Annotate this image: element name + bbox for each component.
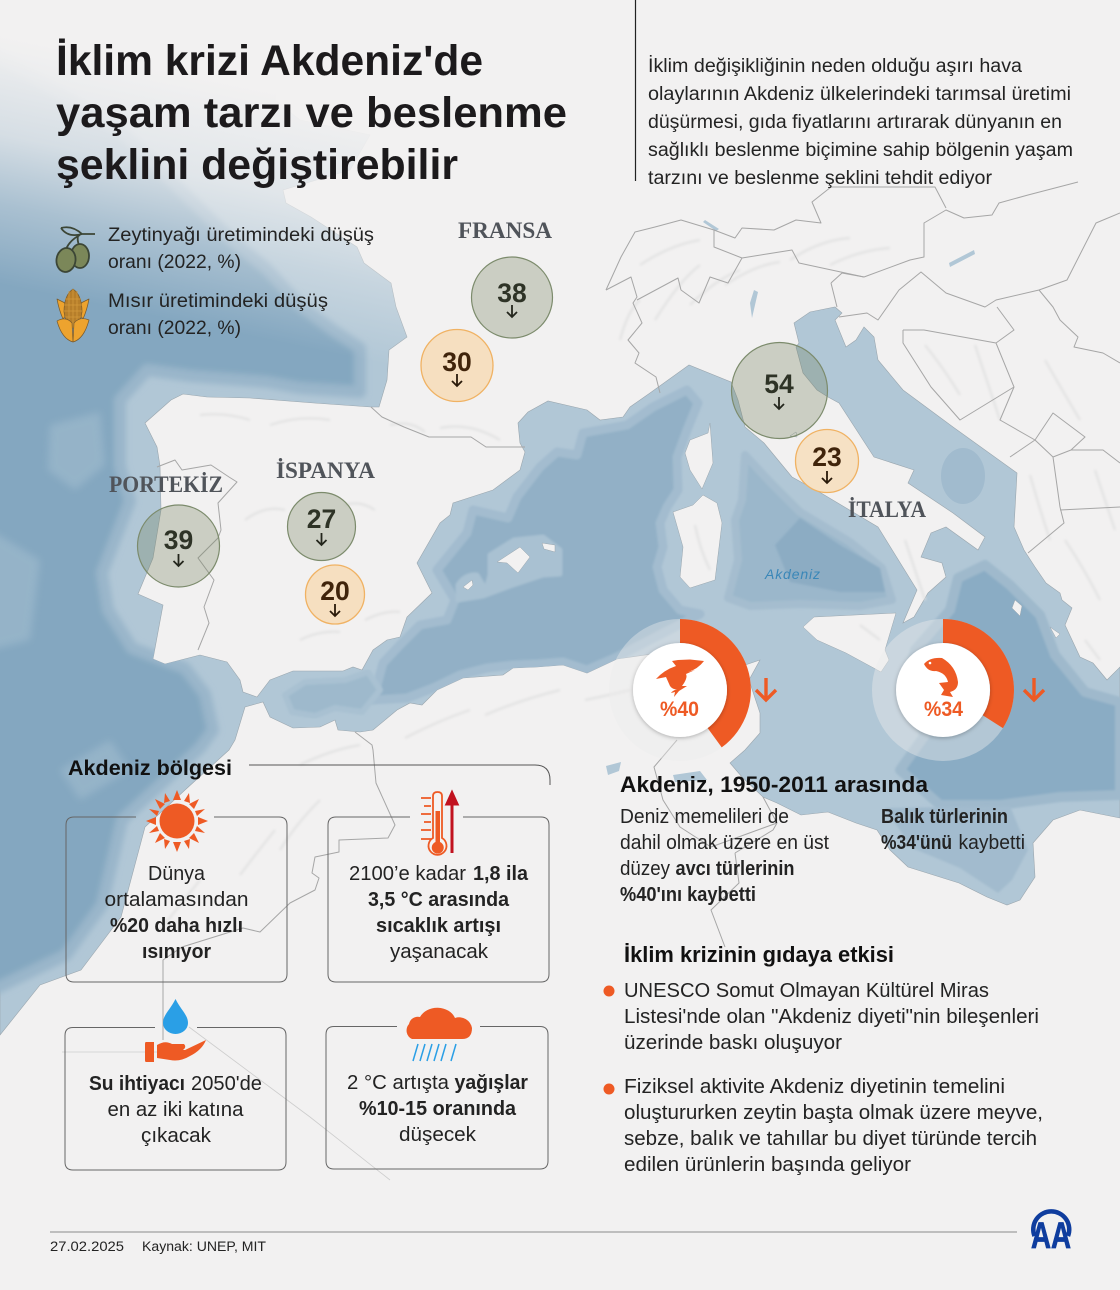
heading: Mediterranean region: Akdeniz bölgesi — [68, 756, 232, 780]
bubble: France corn 30: 30 — [442, 347, 472, 377]
card: warming rate — [66, 790, 287, 982]
text block: Mediterranean species loss: %40'ını kaybetti — [620, 884, 756, 906]
legend label: olive oil — [108, 224, 374, 273]
legend label: corn: oranı (2022, %) — [108, 317, 241, 339]
text block: Mediterranean species loss: düzey — [620, 858, 670, 880]
card: temperature rise: 1,8 ila — [473, 863, 529, 885]
Alboran basin — [285, 672, 380, 716]
intro text: olaylarının Akdeniz ülkelerindeki tarımsal üretimi — [648, 84, 1071, 105]
card: temperature rise: 2100’e kadar — [349, 863, 466, 885]
card: water demand: Su ihtiyacı — [89, 1073, 185, 1095]
icon: fish — [924, 658, 958, 697]
card: temperature rise: sıcaklık artışı — [376, 915, 501, 937]
footer — [50, 1232, 1017, 1254]
card: rainfall — [326, 1008, 548, 1169]
card: warming rate: Dünya — [148, 863, 206, 885]
text block: Mediterranean species loss — [620, 772, 929, 906]
text block: food impact: İklim krizinin gıdaya etkisi — [624, 942, 894, 967]
icon: thermometer — [421, 792, 457, 855]
title: şeklini değiştirebilir — [56, 142, 458, 189]
text block: food impact: UNESCO Somut Olmayan Kültürel Miras — [624, 980, 989, 1002]
donut chart: apex predators 40%: %40 — [660, 698, 699, 721]
bubble: Spain olive 27: 27 — [307, 504, 336, 534]
Gulf of Sirte shelf — [885, 806, 1028, 893]
text block: fish species — [881, 806, 1025, 854]
text block: fish species: %34'ünü — [881, 832, 952, 854]
intro text: sağlıklı beslenme biçimine sahip bölgenin yaşam — [648, 140, 1073, 161]
icon: cloud — [407, 1008, 472, 1061]
icon: hand — [145, 1040, 206, 1062]
card: rainfall: düşecek — [399, 1124, 477, 1146]
intro text: tarzını ve beslenme şeklini tehdit ediyor — [648, 168, 993, 189]
bubble: Spain corn 20 — [306, 565, 364, 624]
bubble: Portugal olive 39 — [138, 505, 220, 587]
legend label: corn: Mısır üretimindeki düşüş — [108, 290, 328, 312]
legend label: olive oil: oranı (2022, %) — [108, 251, 241, 273]
intro text: düşürmesi, gıda fiyatlarını artırarak dünyanın en — [648, 112, 1062, 133]
text block: food impact — [604, 942, 1043, 1176]
relief shading — [160, 238, 1115, 930]
card: warming rate: ortalamasından — [104, 889, 248, 911]
Balearic shelf — [458, 537, 560, 600]
sea label: Akdeniz — [764, 566, 820, 582]
legend label: olive oil: Zeytinyağı üretimindeki düşüş — [108, 224, 374, 246]
text block: food impact: üzerinde baskı oluşuyor — [624, 1032, 842, 1054]
deep water: Atlantic — [0, 20, 360, 1015]
icon: shark — [656, 660, 704, 697]
Tyrrhenian and Sardinia channel — [728, 455, 892, 606]
heading: Mediterranean region — [68, 756, 550, 785]
text block: Mediterranean species loss: dahil olmak üzere en üst — [620, 832, 829, 854]
card: water demand: 2050'de — [191, 1073, 262, 1095]
footer: Kaynak: UNEP, MIT — [142, 1239, 266, 1254]
bubble: Portugal olive 39: 39 — [164, 525, 193, 555]
text block: food impact: Listesi'nde olan "Akdeniz diyeti"nin bileşenleri — [624, 1006, 1039, 1028]
lighter Atlantic patches — [0, 412, 130, 800]
text block: Mediterranean species loss: Akdeniz, 1950-2011 arasında — [620, 772, 929, 797]
country label: Portugal: PORTEKİZ — [109, 472, 223, 497]
bubble: France corn 30 — [421, 330, 493, 402]
islands — [463, 423, 1060, 672]
text block: fish species: kaybetti — [958, 832, 1025, 854]
donut chart: apex predators 40% — [621, 619, 776, 749]
intro text: İklim değişikliğinin neden olduğu aşırı hava — [648, 56, 1022, 77]
bubble: Italy olive 54 — [732, 342, 828, 438]
card: water demand — [65, 999, 286, 1170]
text block: food impact: sebze, balık ve tahıllar bu diyet türünde tercih — [624, 1128, 1037, 1150]
icon: sun — [146, 790, 208, 852]
card: warming rate: %20 daha hızlı — [110, 915, 243, 937]
intro text — [636, 0, 1073, 189]
donut chart: fish species 34% — [884, 619, 1044, 749]
bubble: Italy olive 54: 54 — [764, 369, 794, 399]
country label: Spain: İSPANYA — [276, 458, 375, 483]
icon: corn — [57, 289, 89, 342]
title — [56, 38, 567, 189]
card: water demand: en az iki katına — [108, 1099, 244, 1121]
bubble: France olive 38 — [472, 257, 552, 338]
text block: Mediterranean species loss: avcı türlerinin — [676, 858, 794, 880]
text block: food impact: edilen ürünlerin başında geliyor — [624, 1154, 911, 1176]
title: yaşam tarzı ve beslenme — [56, 90, 567, 137]
footer: 27.02.2025 — [50, 1239, 124, 1254]
bubble: Spain olive 27 — [288, 492, 356, 560]
country label: Italy: İTALYA — [848, 497, 926, 522]
text block: food impact: oluştururken zeytin başta olmak üzere meyve, — [624, 1102, 1043, 1124]
Tyrrhenian deep — [775, 518, 885, 592]
card: temperature rise: yaşanacak — [390, 941, 489, 963]
legend — [55, 224, 374, 342]
card: rainfall: yağışlar — [454, 1072, 528, 1094]
legend label: corn — [108, 290, 328, 339]
country label: France: FRANSA — [458, 218, 552, 243]
deep water: western Mediterranean — [373, 390, 700, 700]
card: rainfall: 2 °C artışta — [347, 1072, 450, 1094]
icon: olive — [55, 227, 95, 273]
text block: fish species: Balık türlerinin — [881, 806, 1008, 828]
logo: AA: AA — [1031, 1215, 1071, 1256]
card: temperature rise — [328, 792, 549, 982]
card: rainfall: %10-15 oranında — [359, 1098, 517, 1120]
Adriatic deep — [941, 448, 985, 504]
bubble: Italy corn 23 — [796, 430, 858, 492]
card: water demand: çıkacak — [141, 1125, 212, 1147]
card: warming rate: ısınıyor — [142, 941, 211, 963]
text block: food impact: Fiziksel aktivite Akdeniz diyetinin temelini — [624, 1076, 1005, 1098]
icon: water drop — [163, 999, 188, 1034]
top fade — [0, 0, 600, 440]
bubble: Italy corn 23: 23 — [812, 442, 842, 472]
text block: Mediterranean species loss: Deniz memelileri de — [620, 806, 789, 828]
country borders — [157, 182, 1120, 1040]
deep water: Ionian — [900, 565, 1120, 805]
title: İklim krizi Akdeniz'de — [56, 38, 483, 85]
lakes — [606, 220, 975, 782]
bubble: Spain corn 20: 20 — [320, 576, 350, 606]
donut chart: fish species 34%: %34 — [924, 698, 963, 721]
bubble: France olive 38: 38 — [497, 278, 527, 308]
card: temperature rise: 3,5 °C arasında — [368, 889, 510, 911]
